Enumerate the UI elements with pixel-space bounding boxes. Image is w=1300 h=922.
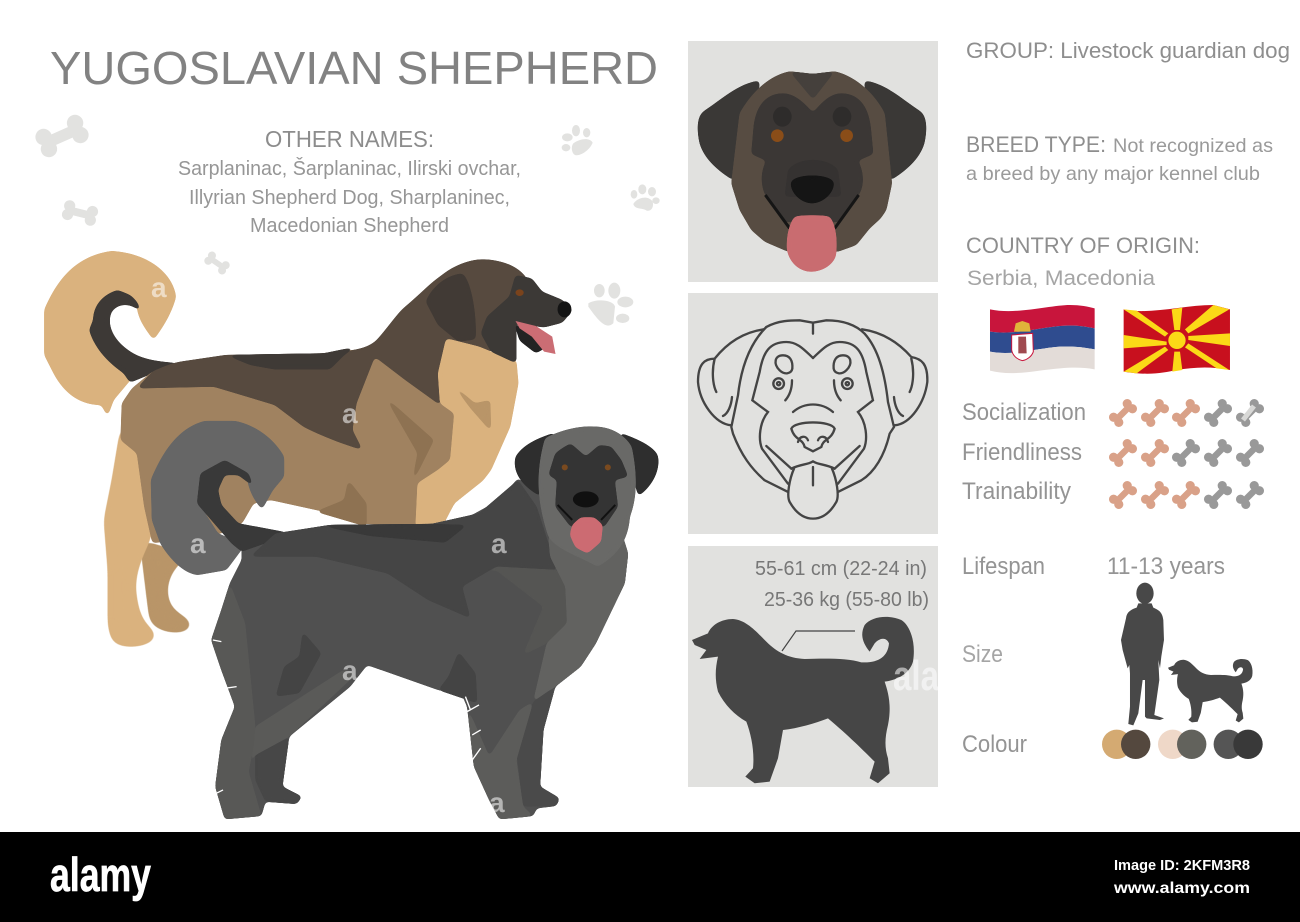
ears (698, 81, 760, 180)
eye (516, 289, 524, 296)
shoulder shading (462, 567, 568, 655)
head fur (731, 71, 892, 252)
nose (573, 491, 599, 507)
mouth (765, 195, 859, 228)
rating: socialization (962, 397, 1266, 429)
text: breed type: a breed by any major kennel club (966, 163, 1260, 185)
near hind leg (104, 420, 160, 647)
text block: other names: Sarplaninac, Šarplaninac, Ilirski ovchar, (178, 157, 521, 180)
rating: trainability: Trainability (962, 478, 1071, 505)
muzzle (785, 160, 841, 197)
front far leg (516, 687, 560, 807)
body (121, 340, 518, 543)
rating: friendliness (962, 437, 1266, 469)
tail dark stripe (89, 290, 183, 383)
mouth (514, 323, 546, 353)
dog silhouette (692, 617, 914, 783)
tail fur (151, 421, 284, 575)
hind inner highlight (248, 670, 357, 772)
eyes (771, 129, 784, 142)
body shading (385, 397, 434, 485)
rating: friendliness: Friendliness (962, 439, 1082, 466)
tongue (516, 321, 556, 354)
text: country of origin: COUNTRY OF ORIGIN: (966, 233, 1200, 258)
nose (558, 301, 571, 317)
decorative bones and paws (33, 112, 660, 326)
flag: Serbia (990, 305, 1095, 373)
far hind leg (140, 540, 194, 632)
title: YUGOSLAVIAN SHEPHERD (50, 42, 658, 94)
height leader line (782, 631, 855, 651)
text: country of origin (966, 233, 1200, 290)
image id: Image ID: 2KFM3R8 (1114, 858, 1250, 874)
illustration: grey dog (151, 421, 658, 819)
head ruff (539, 426, 636, 567)
panel: height and weight silhouette (688, 546, 940, 787)
icon: person silhouette (1121, 583, 1164, 725)
hind far leg (255, 737, 302, 804)
text: country of origin: Serbia, Macedonia (967, 267, 1155, 290)
tail fur (44, 251, 176, 417)
eyes (562, 464, 568, 470)
watermark letters: a (190, 528, 206, 559)
text: lifespan: 11-13 years (1107, 553, 1225, 580)
thigh shading (276, 632, 321, 697)
text: breed type (966, 132, 1273, 185)
panel: dog head colour (688, 41, 938, 282)
ears (515, 433, 555, 496)
tongue (570, 517, 603, 553)
hind outer (211, 583, 261, 819)
mouth (558, 505, 615, 520)
footer band (0, 832, 1300, 922)
muzzle and head (481, 275, 573, 363)
face (548, 443, 628, 527)
body (211, 478, 628, 819)
topline (316, 524, 467, 543)
saddle topline (226, 347, 356, 369)
text: size: Size (962, 641, 1003, 668)
panel: dog head line art (688, 293, 938, 534)
text: colour: Colour (962, 731, 1027, 758)
weight text: 25-36 kg (55-80 lb) (764, 589, 929, 611)
tail dark stripe (197, 460, 291, 552)
tongue (787, 215, 837, 272)
website: www.alamy.com (1113, 880, 1250, 897)
watermark letters: a (151, 272, 167, 303)
watermark letters: a (489, 787, 505, 818)
rating: socialization: Socialization (962, 399, 1086, 426)
saddle (137, 259, 528, 450)
face (751, 93, 873, 223)
text: lifespan: Lifespan (962, 553, 1045, 580)
text block: other names (178, 126, 521, 237)
icon: small dog silhouette (1168, 659, 1253, 722)
nose (791, 176, 834, 203)
brows (773, 107, 792, 127)
text block: other names: OTHER NAMES: (265, 126, 434, 152)
watermark letters: a (342, 655, 358, 686)
rating: trainability (962, 478, 1266, 511)
ear (426, 273, 476, 342)
colour swatches (1102, 730, 1263, 759)
flag: Macedonia (1124, 305, 1230, 374)
height text: 55-61 cm (22-24 in) (755, 558, 927, 580)
text block: other names: Macedonian Shepherd (250, 215, 449, 237)
alamy logo: alamy (50, 848, 151, 901)
text: group: GROUP: Livestock guardian dog (966, 38, 1290, 63)
watermark letters (151, 272, 507, 818)
watermark letters: a (491, 528, 507, 559)
text: lifespan (962, 553, 1225, 580)
chest (533, 510, 628, 702)
text: breed type: BREED TYPE: (966, 132, 1106, 157)
watermark letters: a (342, 398, 358, 429)
watermark: ala (893, 652, 940, 699)
text block: other names: Illyrian Shepherd Dog, Sharplaninec, (189, 187, 510, 209)
text: breed type: Not recognized as (1113, 135, 1273, 157)
fur highlights (213, 578, 481, 793)
saddle (250, 480, 557, 618)
illustration: tan and brown dog (44, 251, 573, 647)
chest (416, 338, 518, 527)
front near leg (467, 702, 533, 819)
